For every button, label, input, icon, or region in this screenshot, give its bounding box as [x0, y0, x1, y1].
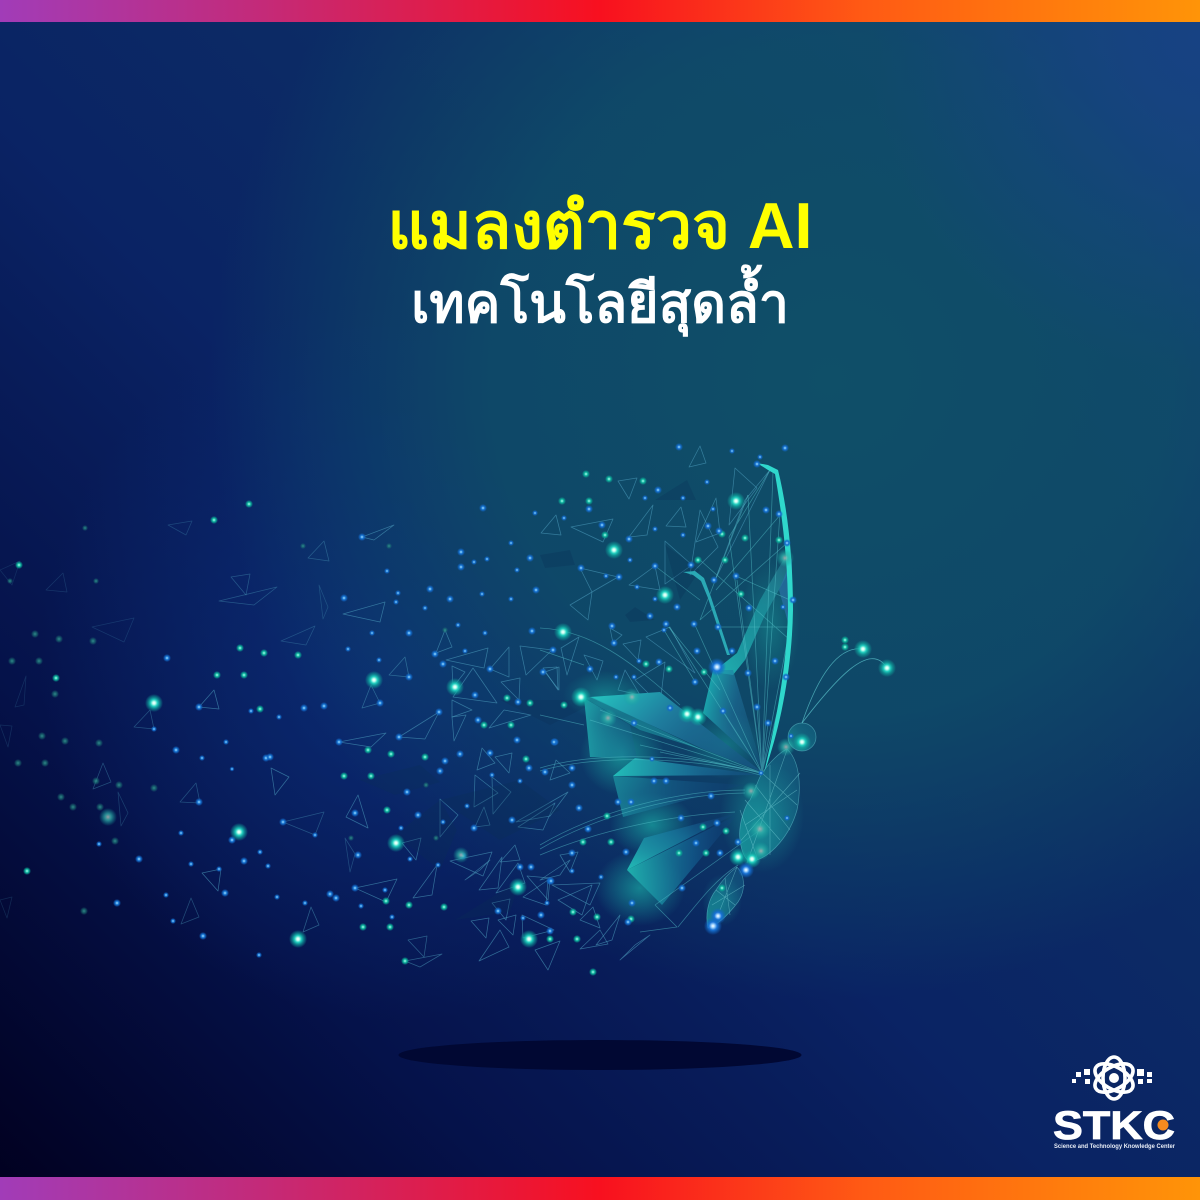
logo wordmark: STKC	[1053, 1104, 1175, 1148]
bottom upper facet	[627, 813, 737, 870]
small blue particles	[96, 443, 797, 958]
thorax	[740, 749, 799, 862]
title line 1: แมลงตำรวจ AI	[388, 190, 812, 262]
glow blobs	[563, 560, 804, 926]
base facet	[703, 670, 762, 767]
ribbon	[713, 557, 790, 675]
body mesh	[712, 750, 800, 915]
floor shadow	[398, 1040, 802, 1070]
title	[388, 190, 812, 337]
logo pixel squares	[1072, 1069, 1152, 1084]
forewing edge	[757, 463, 793, 773]
logo tagline: Science and Technology Knowledge Center	[1054, 1144, 1176, 1150]
antennae	[802, 649, 887, 723]
soft dark facets	[360, 480, 700, 920]
particle triangles	[0, 446, 770, 970]
middle upper facet	[613, 758, 762, 776]
logo: STKC	[1053, 1057, 1176, 1150]
small teal particles	[15, 470, 849, 976]
blue facet	[779, 558, 792, 637]
diagonal bright strip	[584, 697, 703, 750]
title line 2: เทคโนโลยีสุดล้ำ	[411, 264, 789, 337]
upper wing facets	[703, 557, 792, 767]
large glowing nodes	[99, 492, 896, 948]
logo orange dot	[1158, 1120, 1168, 1130]
body	[707, 723, 816, 928]
left drop panel	[584, 698, 637, 758]
top facet	[590, 692, 762, 772]
butterfly	[540, 463, 887, 932]
bottom lower facet	[627, 815, 737, 905]
inner wing edge	[683, 571, 730, 655]
dim teal particles	[7, 525, 448, 915]
logo atom icon	[1090, 1057, 1138, 1099]
top gradient bar	[0, 0, 1200, 22]
lower wing facets	[584, 692, 762, 905]
head	[788, 723, 816, 751]
bottom gradient bar	[0, 1177, 1200, 1200]
middle lower facet	[613, 776, 743, 817]
wing vein lines	[540, 470, 790, 932]
abdomen	[707, 867, 744, 928]
